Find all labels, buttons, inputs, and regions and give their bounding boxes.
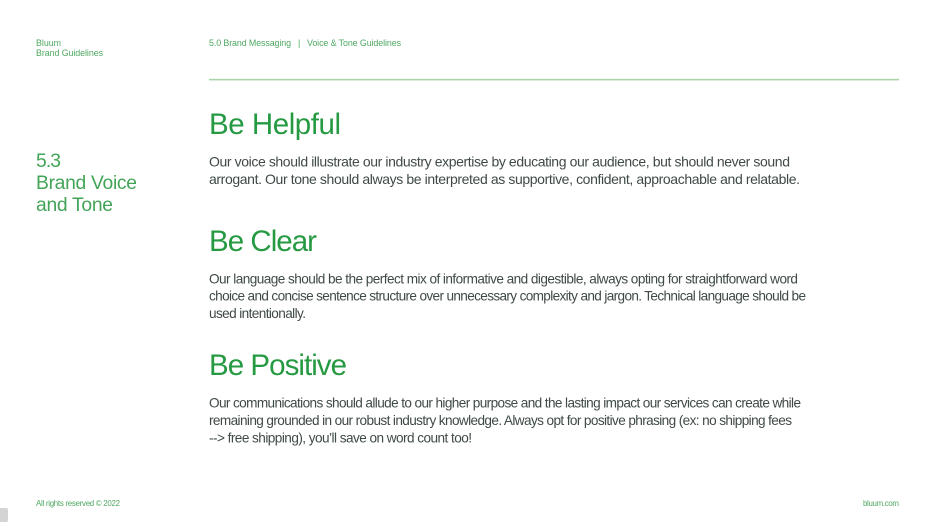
heading: Be Positive: Be Positive bbox=[209, 349, 347, 382]
heading: Be Clear: Be Clear bbox=[209, 225, 317, 258]
text block: Be Clear: used intentionally. bbox=[209, 306, 306, 321]
section title: 5.3 bbox=[36, 151, 61, 172]
text block: Be Positive: Our communications should allude to our higher purpose and the lasting impact our services can create while bbox=[209, 396, 801, 410]
text block: Be Clear bbox=[209, 272, 806, 321]
document label: Brand Guidelines bbox=[36, 48, 104, 58]
section title: and Tone bbox=[36, 195, 113, 216]
text block: Be Positive bbox=[209, 396, 801, 446]
corner badge bbox=[0, 508, 8, 522]
section title: Brand Voice bbox=[36, 173, 137, 194]
text block: Be Clear: choice and concise sentence structure over unnecessary complexity and jargon. Technical language should be bbox=[209, 288, 806, 304]
document label bbox=[36, 38, 104, 58]
text block: Be Helpful: arrogant. Our tone should always be interpreted as supportive, confident, approachable and relatable. bbox=[209, 171, 800, 187]
text block: Be Positive: --> free shipping), you’ll save on word count too! bbox=[209, 430, 472, 446]
breadcrumb header: 5.0 Brand Messaging bbox=[209, 38, 291, 48]
heading: Be Helpful: Be Helpful bbox=[209, 108, 341, 141]
document label: Bluum bbox=[36, 38, 61, 48]
text block: Be Clear: Our language should be the perfect mix of informative and digestible, always opting for straightforward word bbox=[209, 272, 798, 286]
footer: website: bluum.com bbox=[863, 499, 899, 508]
breadcrumb header: Voice & Tone Guidelines bbox=[307, 38, 402, 48]
text block: Be Helpful: Our voice should illustrate our industry expertise by educating our audience, but should never sound bbox=[209, 154, 790, 170]
footer: copyright: All rights reserved © 2022 bbox=[36, 499, 120, 508]
breadcrumb header bbox=[209, 38, 402, 48]
breadcrumb header: | bbox=[298, 38, 300, 48]
text block: Be Helpful bbox=[209, 154, 800, 187]
section title bbox=[36, 151, 137, 216]
text block: Be Positive: remaining grounded in our robust industry knowledge. Always opt for positive phrasing (ex: no shipping fees bbox=[209, 413, 792, 428]
